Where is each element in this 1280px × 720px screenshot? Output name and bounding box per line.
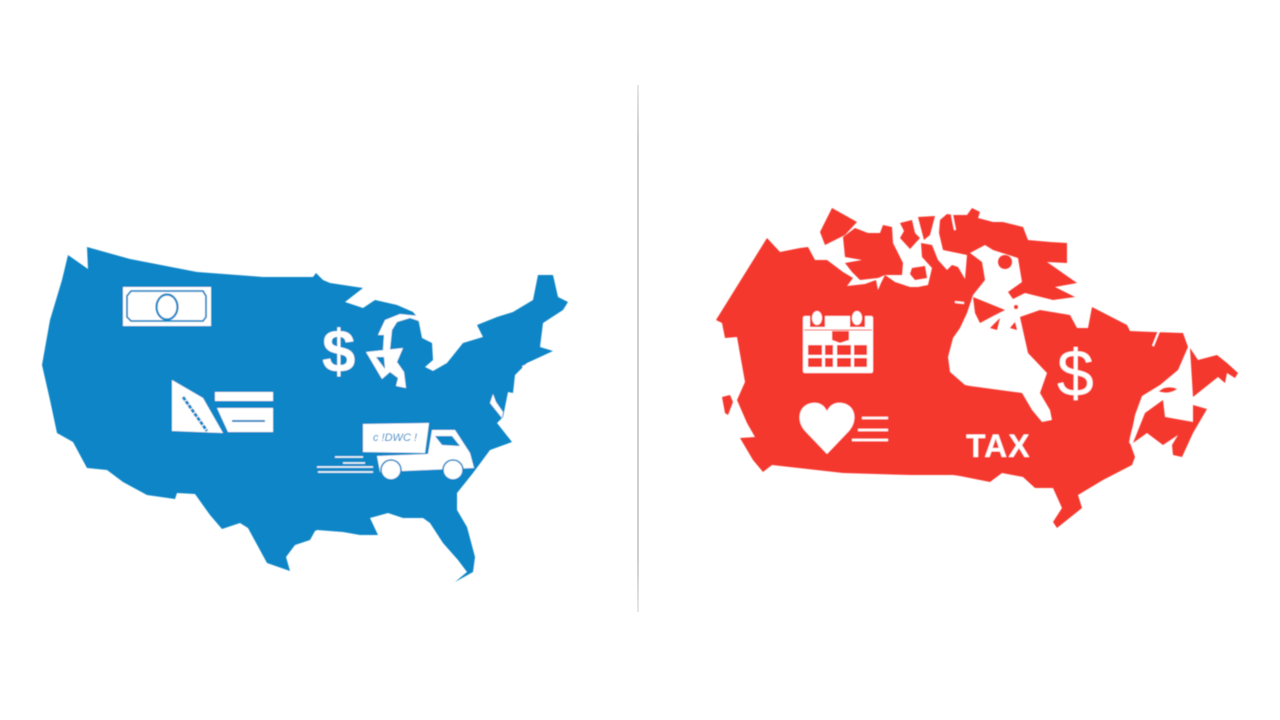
icon: heart with lines (800, 403, 888, 454)
panel: Canada map with icons (716, 208, 1238, 528)
truck label: c !DWC ! (373, 432, 417, 444)
icon: dollar sign: $ (322, 318, 355, 385)
Vancouver Island (722, 395, 733, 415)
icon: banknote (123, 287, 211, 326)
label: TAX: TAX (966, 428, 1031, 464)
icon: calendar (803, 311, 873, 373)
arctic islands (820, 208, 857, 245)
maritime provinces (1133, 400, 1207, 457)
icon: document and credit card (172, 380, 273, 433)
icon: delivery truck (317, 423, 474, 480)
Newfoundland (1190, 348, 1238, 397)
icon: abstract mark (366, 348, 406, 388)
icon: dollar sign: $ (1057, 336, 1094, 410)
map: Canada silhouette (716, 208, 1238, 528)
coastline cut-outs (952, 215, 1162, 443)
divider line (637, 85, 639, 612)
lake and coastline cut-outs (378, 314, 533, 418)
map: United States silhouette (42, 247, 568, 582)
panel: USA map with icons (42, 247, 568, 582)
